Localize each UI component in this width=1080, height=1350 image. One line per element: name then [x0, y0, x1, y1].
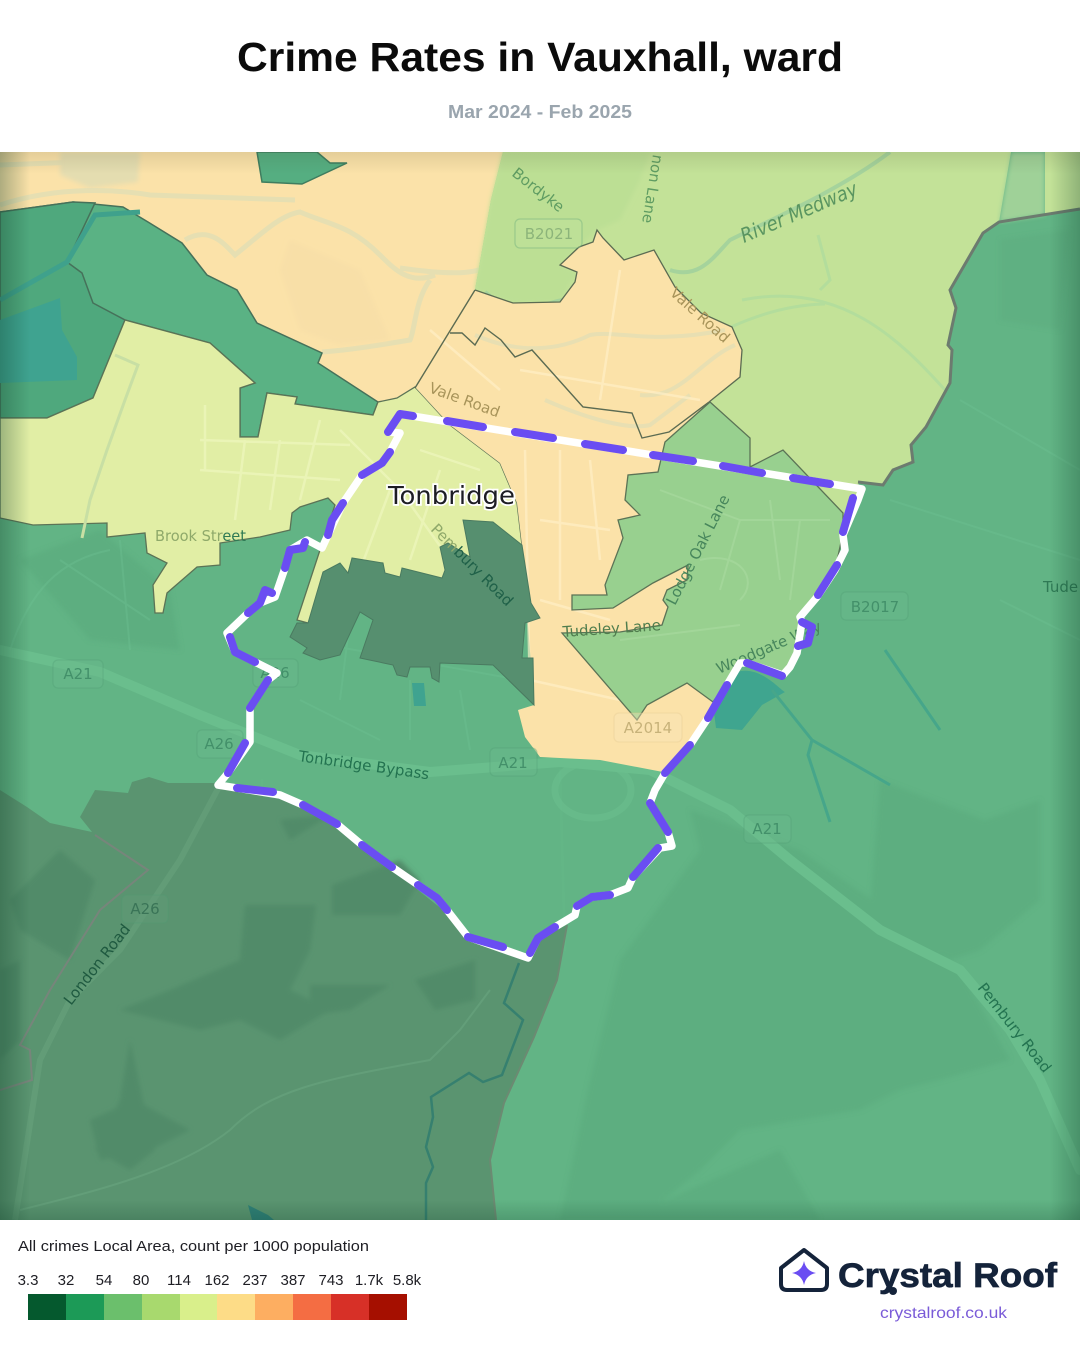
shield label A26 south: A26 — [130, 900, 160, 918]
label Tonbridge Bypass: Tonbridge Bypass — [296, 747, 431, 783]
south-east edge of woodland — [490, 925, 567, 1220]
shield label A21: A21 — [63, 665, 93, 683]
area: medium green Lodge Oak — [562, 402, 843, 720]
flood plain patch — [60, 152, 140, 188]
shield label A2014: A2014 — [624, 719, 672, 737]
road and place labels — [60, 153, 1078, 1076]
label Lodge Oak Lane: Lodge Oak Lane — [663, 492, 734, 608]
wordmark key detail — [889, 1287, 897, 1295]
label Tude cut off: Tude — [1042, 578, 1078, 596]
website url: crystalroof.co.uk — [880, 1305, 1008, 1322]
choropleth map — [0, 152, 1080, 1220]
legend scale values: 237 — [242, 1272, 268, 1289]
area: central tan — [415, 230, 742, 772]
east boundary heavy line — [858, 209, 1080, 485]
title: Crime Rates in Vauxhall, ward — [237, 34, 843, 80]
shield label A26 covered: A26 — [260, 664, 290, 682]
ward boundary: purple dashes — [228, 414, 853, 953]
shield label B2021: B2021 — [525, 225, 573, 243]
shield label B2017: B2017 — [851, 598, 899, 616]
stream channels: south east — [772, 650, 940, 822]
label London Road: London Road — [60, 921, 134, 1008]
icon: house outline — [781, 1250, 827, 1290]
legend scale values: 5.8k — [393, 1272, 422, 1289]
small pond at bottom edge — [248, 1205, 274, 1220]
stream: northwest — [0, 212, 140, 300]
legend scale values: 32 — [58, 1272, 74, 1289]
woodland patches: east — [20, 230, 1070, 1220]
shield label A26: A26 — [204, 735, 234, 753]
label Bordyke: Bordyke — [509, 164, 568, 216]
area: south-west dark woodland — [0, 777, 567, 1220]
area: top right strip — [999, 152, 1045, 222]
area: northwest tan — [0, 152, 503, 402]
shield label A21 centre: A21 — [498, 754, 528, 772]
River Medway line — [485, 152, 890, 308]
major road: A21 Tonbridge Bypass — [12, 648, 1070, 1158]
base area: south and east green — [0, 152, 1080, 1220]
legend — [18, 1238, 422, 1320]
boundary lines: inner tan — [415, 290, 709, 438]
label Tonbridge: Tonbridge — [387, 481, 515, 510]
logo: Crystal Roof — [781, 1250, 1058, 1322]
lake near Woodgate Way — [713, 671, 785, 730]
stream: central tan — [475, 330, 735, 426]
label River Medway: River Medway — [737, 176, 862, 248]
ward boundary: white line — [218, 414, 862, 958]
legend scale values: 162 — [204, 1272, 230, 1289]
boundary: south-west parish — [0, 835, 148, 1090]
boundary line: central tan north edge — [475, 230, 742, 402]
woodland patches: south-west — [0, 815, 475, 1170]
area: northwest green — [0, 202, 378, 437]
map edge vignette — [0, 152, 1080, 1220]
area: high crime dark green block — [290, 520, 540, 705]
legend scale values — [18, 1272, 422, 1289]
lanes: south-west — [20, 990, 490, 1210]
label Brook Street: Brook Street — [155, 527, 246, 545]
legend scale values: 114 — [167, 1272, 191, 1289]
label Tudeley Lane: Tudeley Lane — [561, 616, 662, 641]
subtitle: date range: Mar 2024 - Feb 2025 — [448, 102, 632, 122]
streets: Tonbridge west — [200, 405, 480, 570]
lake — [0, 298, 77, 383]
legend scale values: 743 — [318, 1272, 344, 1289]
label Lane fragment: non Lane — [638, 153, 667, 225]
legend scale values: 1.7k — [355, 1272, 384, 1289]
legend scale values: 80 — [133, 1272, 149, 1289]
legend title: All crimes Local Area, count per 1000 population — [18, 1238, 369, 1255]
label Pembury Road: Pembury Road — [427, 520, 517, 610]
faint stream on yellow-green — [82, 355, 138, 538]
streets: Lodge Oak estate — [620, 490, 830, 640]
legend scale values: 3.3 — [18, 1272, 38, 1289]
label Vale Road: Vale Road — [427, 379, 502, 421]
area: far northwest darker green — [0, 202, 125, 418]
road shields — [53, 219, 908, 923]
streets: central tan — [430, 270, 700, 700]
icon: crystal star — [792, 1261, 816, 1285]
road: A26 London Road — [15, 785, 220, 1220]
area: north-east light green — [475, 152, 1011, 530]
tan polygon: NE field — [280, 240, 390, 345]
local streets: southwest estates — [10, 400, 1080, 750]
river: south-west — [426, 963, 523, 1220]
area: top right corner — [1045, 152, 1080, 215]
area: north green field — [473, 152, 503, 290]
wordmark: Crystal Roof — [838, 1257, 1058, 1295]
shield label A21 east: A21 — [752, 820, 782, 838]
label Woodgate Way: Woodgate Way — [714, 617, 824, 678]
label Vale Road north: Vale Road — [666, 284, 733, 347]
small pond — [412, 683, 426, 706]
river branches: north east — [731, 234, 946, 391]
legend colour swatches — [28, 1294, 407, 1320]
legend scale values: 387 — [280, 1272, 306, 1289]
small green patch: north — [257, 152, 347, 184]
area: Tonbridge west and centre yellow-green — [0, 320, 522, 623]
label Pembury Road south: Pembury Road — [974, 979, 1055, 1076]
legend scale values: 54 — [96, 1272, 112, 1289]
river meander: northwest tan — [0, 160, 490, 352]
